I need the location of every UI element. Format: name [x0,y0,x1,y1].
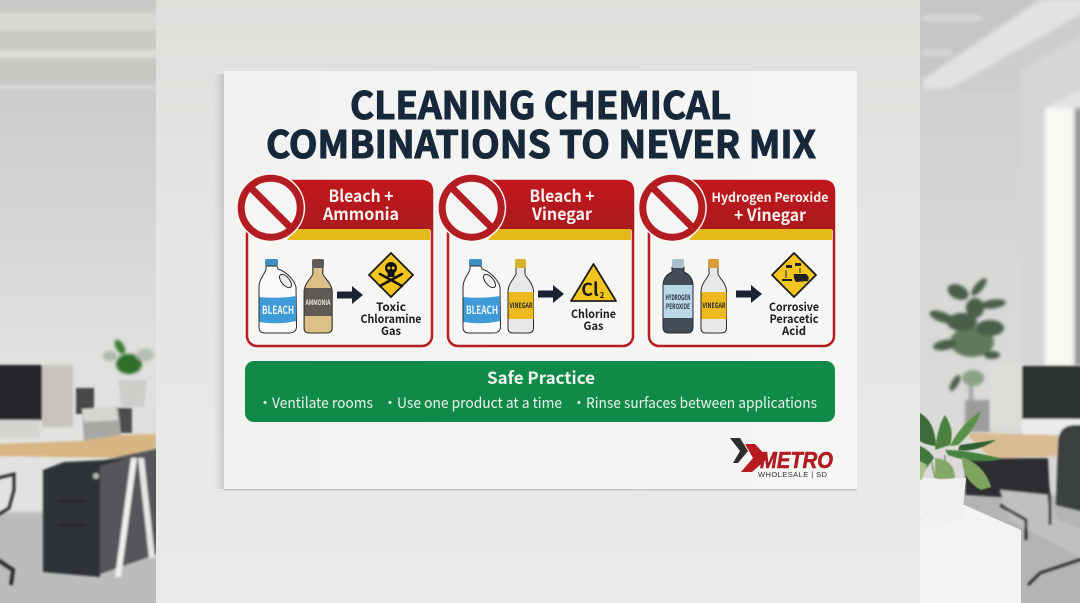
bullet list: • [383,392,397,413]
heading: Bleach + [530,183,595,207]
result text [769,299,819,339]
arrow [736,285,762,303]
heading: Vinegar [531,201,593,225]
icon: ammonia bottle: AMMONIA [305,297,331,308]
panel: bleach + vinegar [437,173,634,346]
office chair [0,474,14,585]
panel: safe practice [245,361,835,422]
icon: vinegar bottle [701,259,726,333]
icon: prohibition sign [437,173,506,242]
poster [214,71,857,490]
warning stripe [287,229,430,240]
icon: corrosive hazard diamond [772,253,816,297]
heading: Ammonia [322,201,399,225]
logo: metro wholesale [730,438,833,479]
icon: white pot [920,478,966,522]
panel: bleach + ammonia [236,173,433,346]
bullet list: Rinse surfaces between applications [586,392,817,413]
icon: prohibition sign [236,173,305,242]
icon: foreground plant [918,411,1002,490]
result text: Peracetic [770,311,818,327]
icon: hydrogen peroxide bottle [663,259,693,333]
icon: vinegar bottle [508,259,534,333]
heading: Bleach + [328,183,394,207]
left office photo [0,0,161,603]
heading: Hydrogen Peroxide [712,187,828,206]
logo: metro wholesale: WHOLESALE | SD [758,470,828,479]
header band [285,180,433,230]
icon: chlorine gas triangle [571,264,616,302]
icon: left potted plant [103,338,154,374]
icon: prohibition sign [638,173,707,242]
icon: skull hazard diamond [369,253,413,297]
heading: Safe Practice [487,364,595,389]
title: COMBINATIONS TO NEVER MIX [266,114,816,169]
result text: Chlorine [571,306,616,322]
heading [530,183,595,225]
icon: vinegar bottle: VINEGAR [509,300,532,311]
header band [486,180,634,230]
result text: Gas [381,323,401,339]
bullet list: • [258,392,272,413]
result text: Corrosive [769,299,819,315]
result text: Toxic [376,299,406,315]
icon: bleach bottle [259,259,296,333]
heading: + Vinegar [734,202,807,226]
title: CLEANING CHEMICAL [350,75,731,130]
bullet list: • [572,392,586,413]
filing cabinet [43,448,160,577]
icon: chlorine gas triangle: 2 [600,290,605,301]
heading [712,187,828,226]
result text [360,299,422,339]
icon: hydrogen peroxide bottle: HYDROGEN [666,292,690,303]
icon: background plant [928,276,1006,432]
result text: Chloramine [360,311,422,327]
white counter [920,504,1021,603]
result text: Acid [781,323,806,339]
icon: vinegar bottle: VINEGAR [702,300,725,311]
result text: Gas [584,318,604,334]
warning stripe [488,229,631,240]
title [266,75,816,169]
bullet list: Ventilate rooms [272,392,373,413]
panel: hydrogen peroxide + vinegar [638,173,835,346]
heading [322,183,399,225]
icon: ammonia bottle [304,259,332,333]
header band [687,180,835,230]
icon: bleach bottle [463,259,500,333]
bullet list [258,392,817,413]
logo: metro wholesale: METRO [760,447,833,473]
desk [0,434,156,458]
result text [571,306,616,334]
bullet list: Use one product at a time [397,392,562,413]
icon: bleach bottle: BLEACH [262,302,294,318]
arrow [337,286,363,304]
icon: chlorine gas triangle: Cl [581,276,599,302]
right office photo [915,0,1080,603]
icon: bleach bottle: BLEACH [466,302,498,318]
arrow [538,285,564,303]
warning stripe [689,229,832,240]
icon: chevrons [730,438,768,472]
icon: hydrogen peroxide bottle: PEROXIDE [666,301,690,312]
